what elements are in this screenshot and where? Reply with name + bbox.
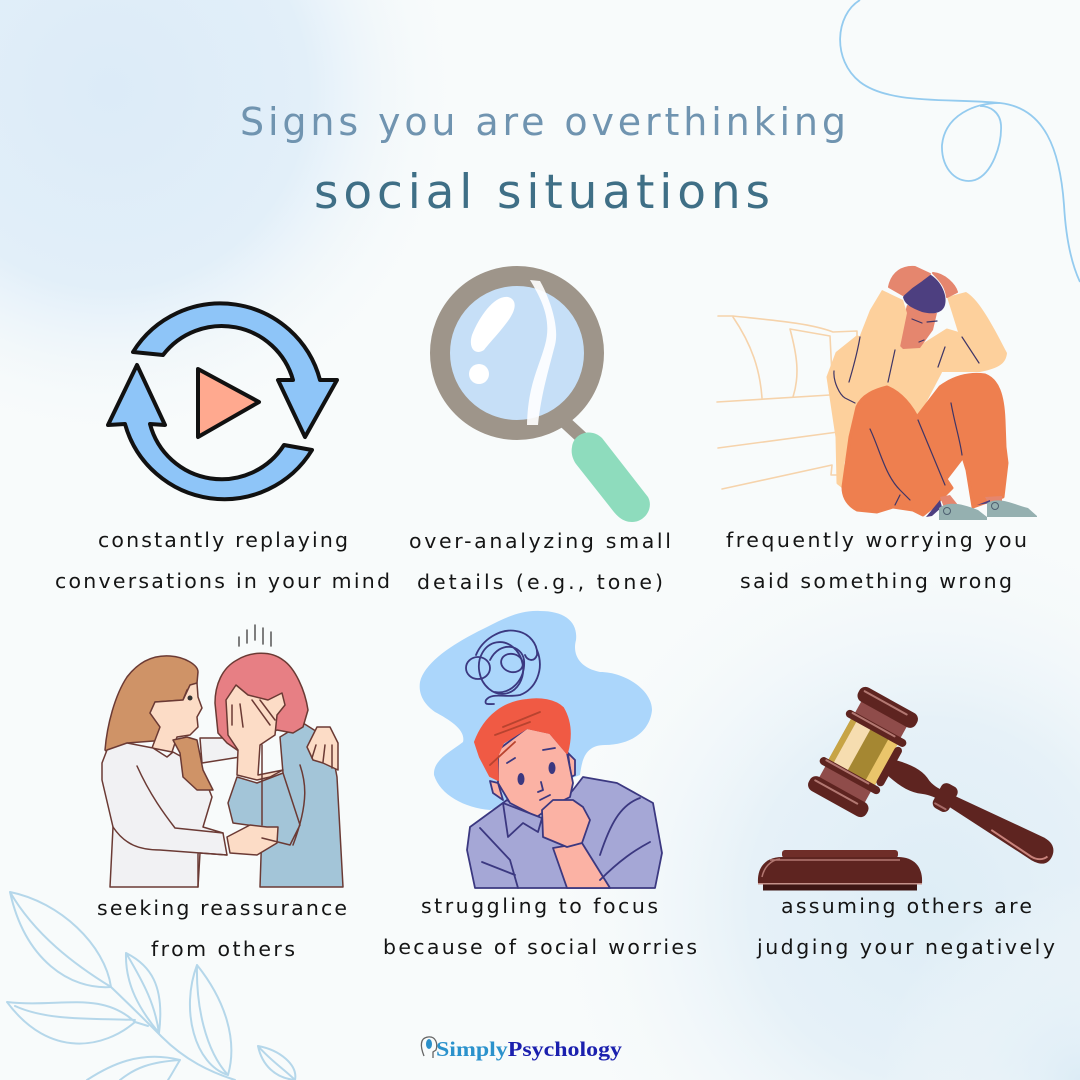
caption: worrying: frequently worrying you [726, 528, 1027, 552]
caption: over-analyzing: over-analyzing small [409, 529, 671, 553]
decorative curve top right [840, 0, 1080, 282]
caption: over-analyzing: details (e.g., tone) [417, 570, 663, 594]
illustration: worried person on bed [717, 267, 1037, 520]
illustration: gavel [758, 684, 1080, 908]
decorative leaves bottom left [7, 892, 295, 1080]
caption: struggling [383, 894, 697, 959]
title: Signs you are overthinking [240, 100, 846, 144]
illustration: two women, reassurance [102, 625, 343, 887]
title: social situations [314, 165, 770, 220]
logo: Simply Psychology: Simply Psychology [436, 1037, 623, 1061]
stress lines [239, 625, 271, 646]
caption: worrying: said something wrong [740, 569, 1012, 593]
caption: judging: judging your negatively [756, 935, 1055, 959]
illustration: confused man with scribble thought [420, 611, 662, 888]
caption: worrying [726, 528, 1027, 593]
caption: struggling: because of social worries [383, 935, 697, 959]
caption: reassurance: seeking reassurance [97, 896, 347, 920]
caption: replaying: constantly replaying [98, 528, 348, 552]
icon: replay arrows with play button [108, 303, 337, 499]
caption: judging [756, 894, 1055, 959]
caption: reassurance [97, 896, 347, 961]
caption: replaying [55, 528, 390, 593]
caption: reassurance: from others [151, 937, 295, 961]
title [240, 100, 846, 220]
caption: replaying: conversations in your mind [55, 569, 390, 593]
caption: over-analyzing [409, 529, 671, 594]
icon: magnifying glass [440, 276, 650, 522]
caption: judging: assuming others are [781, 894, 1032, 918]
couch outline [717, 316, 857, 489]
caption: struggling: struggling to focus [421, 894, 658, 918]
